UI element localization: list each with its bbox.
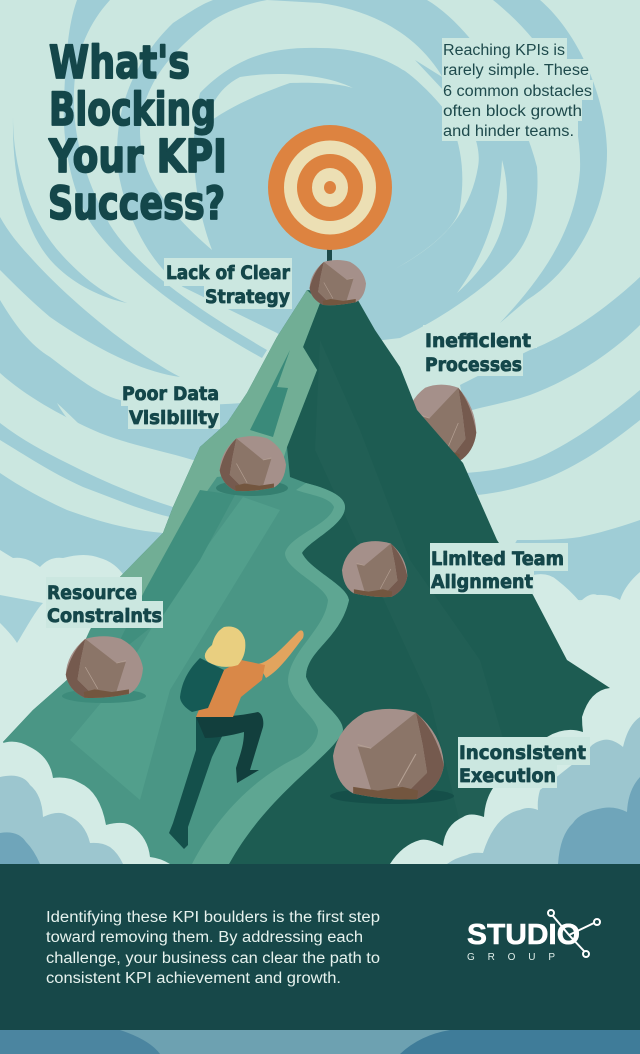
background cloud: left <box>0 550 125 760</box>
boulder: resource constraints <box>66 636 143 698</box>
label: limited team alignment <box>430 543 568 594</box>
climbing path <box>192 483 349 864</box>
boulder: poor data visibility <box>220 436 286 491</box>
footer text: Identifying these KPI boulders is the first step <box>46 909 380 926</box>
boulder: top <box>310 260 366 305</box>
torso <box>196 660 265 717</box>
target <box>268 125 392 264</box>
title: Your KPI <box>48 130 227 183</box>
mountain silhouette <box>3 290 610 864</box>
intro text: often block growth <box>443 103 582 120</box>
label: inconsistent execution <box>458 737 590 788</box>
label: lack of clear strategy: Lack of Clear <box>166 262 291 284</box>
label: limited team alignment: Alignment <box>431 571 533 593</box>
arm <box>258 630 304 678</box>
footer text: toward removing them. By addressing each <box>46 929 363 946</box>
pole <box>327 248 332 264</box>
hair <box>205 627 245 667</box>
intro text <box>442 38 593 141</box>
front leg <box>196 712 263 783</box>
label: inefficient processes: Inefficient <box>425 330 531 352</box>
boulder: inefficient processes <box>405 385 476 462</box>
label: inconsistent execution: Inconsistent <box>459 742 586 764</box>
foreground clouds: right <box>390 680 640 864</box>
intro text: 6 common obstacles <box>443 83 592 100</box>
intro text: rarely simple. These <box>443 62 589 79</box>
label: resource constraints <box>46 577 163 628</box>
boulder shadow: resource <box>62 689 146 703</box>
title <box>48 36 227 230</box>
label: limited team alignment: Limited Team <box>431 548 564 570</box>
bottom strip <box>0 1030 640 1054</box>
lighter streak: left slope <box>70 497 280 800</box>
label: inefficient processes: Processes <box>425 354 522 376</box>
footer panel <box>0 864 640 1030</box>
left lit face <box>3 290 349 864</box>
backpack <box>180 658 224 712</box>
intro text: and hinder teams. <box>443 123 574 140</box>
climber <box>169 627 304 849</box>
logo: STUDIO <box>467 919 580 951</box>
label: poor data visibility <box>121 379 220 429</box>
upper wedge <box>250 350 290 437</box>
label: resource constraints: Constraints <box>47 605 162 627</box>
boulder shadow: poor data <box>216 480 288 496</box>
footer text: consistent KPI achievement and growth. <box>46 970 341 987</box>
footer text: challenge, your business can clear the path to <box>46 950 380 967</box>
label: lack of clear strategy: Strategy <box>205 286 291 308</box>
title: Success? <box>48 177 225 230</box>
logo <box>467 910 600 963</box>
label: poor data visibility: Visibility <box>129 407 220 429</box>
mountain <box>3 290 610 864</box>
foreground clouds: left <box>0 742 170 864</box>
footer text <box>46 909 380 987</box>
background swirl <box>0 0 640 600</box>
darker streak <box>110 490 235 660</box>
boulder: inconsistent execution <box>333 709 444 799</box>
background cloud: left blue gap <box>0 595 43 643</box>
shadow face streak <box>315 340 540 864</box>
label: inconsistent execution: Execution <box>459 765 556 787</box>
label: inefficient processes <box>423 325 537 376</box>
label: resource constraints: Resource <box>47 582 137 604</box>
boulder shadow: inconsistent execution <box>330 788 454 804</box>
background cloud: right <box>520 572 640 740</box>
title: What's <box>49 36 190 89</box>
back leg <box>169 716 232 849</box>
title: Blocking <box>49 83 216 136</box>
label: poor data visibility: Poor Data <box>122 383 219 405</box>
upper light edge <box>95 290 320 625</box>
logo: GROUP <box>467 952 555 963</box>
label: lack of clear strategy <box>164 258 292 309</box>
boulder: limited team alignment <box>342 541 407 597</box>
intro text: Reaching KPIs is <box>443 42 565 59</box>
